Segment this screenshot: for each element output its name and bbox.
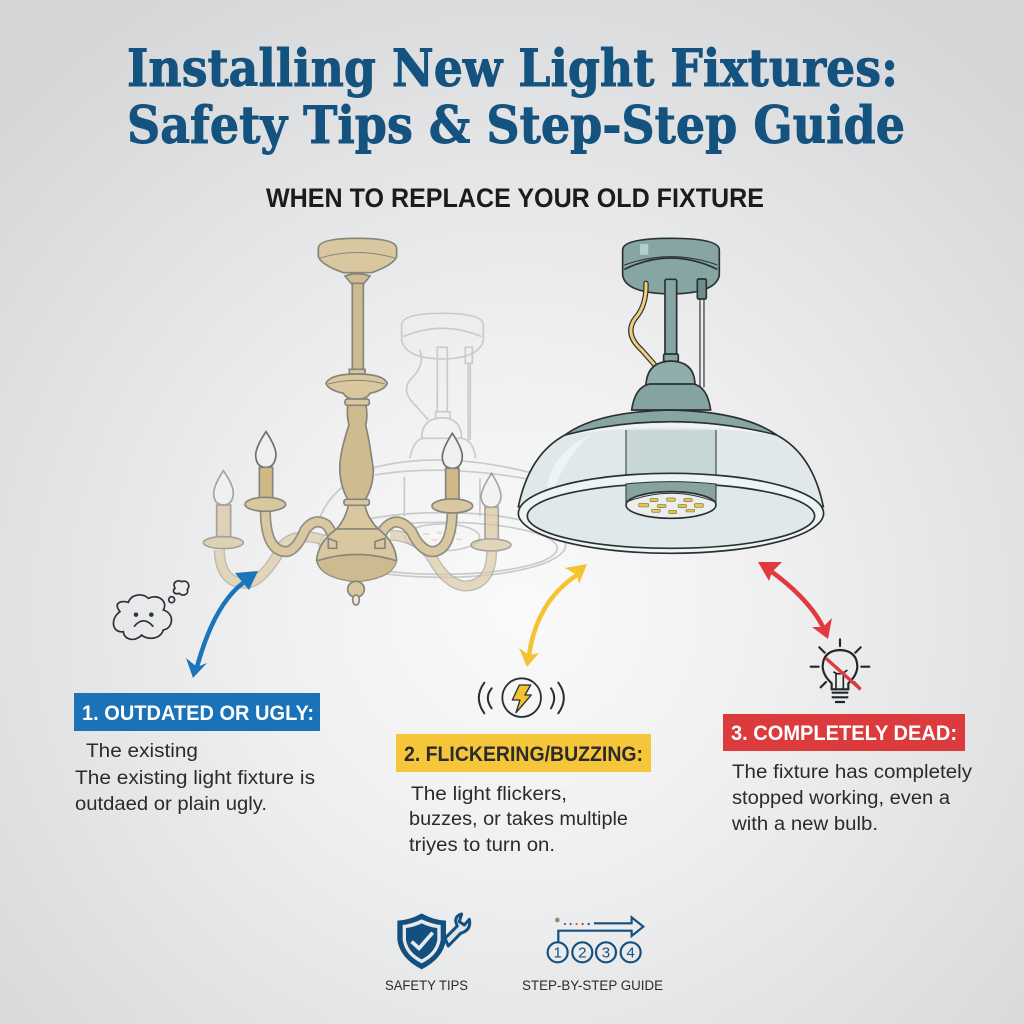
text block 1: The existing — [86, 741, 198, 762]
label: step-by-step guide: STEP-BY-STEP GUIDE — [522, 978, 663, 993]
text block 1: The existing light fixture is — [75, 768, 315, 789]
title: Installing New Light Fixtures: — [127, 39, 898, 99]
label bar blue: 1. OUTDATED OR UGLY: — [82, 701, 314, 725]
front arms — [265, 508, 333, 552]
domes — [646, 361, 695, 385]
hub — [317, 529, 397, 582]
cup — [326, 374, 387, 399]
LED plate — [626, 492, 716, 518]
text block 2: triyes to turn on. — [409, 835, 555, 856]
canopy — [623, 238, 719, 294]
glass shade — [518, 422, 823, 507]
icon: step-by-step arrow: 3 — [602, 945, 610, 962]
icon: step-by-step arrow: 4 — [626, 945, 635, 962]
text block 1 — [75, 741, 315, 815]
rim — [518, 473, 824, 553]
icon: sad cloud — [113, 581, 189, 639]
label: safety tips: SAFETY TIPS — [385, 978, 468, 993]
ghost pendant outline — [318, 313, 566, 577]
label bar red: 3. COMPLETELY DEAD: — [731, 721, 957, 745]
label bar yellow — [396, 734, 651, 772]
text block 3: with a new bulb. — [731, 814, 878, 835]
title — [127, 39, 905, 156]
canopy — [318, 238, 397, 273]
callout 1: outdated or ugly — [74, 693, 320, 815]
icon: flickering bolt — [479, 678, 564, 717]
callout 2: flickering or buzzing — [396, 734, 651, 856]
icon: step-by-step arrow: 1 — [553, 945, 562, 962]
label bar red — [723, 714, 965, 751]
icon: dead bulb — [811, 639, 869, 702]
label bar blue — [74, 693, 320, 731]
inner tube — [626, 430, 716, 475]
rods — [665, 279, 677, 355]
text block 3: The fixture has completely — [732, 762, 973, 783]
baluster — [340, 405, 373, 500]
rod — [352, 283, 363, 369]
label bar yellow: 2. FLICKERING/BUZZING: — [404, 742, 643, 766]
text block 3 — [731, 762, 973, 835]
text block 2: The light flickers, — [411, 784, 567, 805]
faded rear arms — [203, 471, 511, 586]
arrow: yellow — [519, 564, 587, 667]
callout 3: completely dead — [723, 714, 973, 835]
icon: step-by-step arrow: 2 — [578, 945, 586, 962]
wire — [631, 283, 654, 364]
icon: safety shield and wrench — [397, 913, 470, 969]
old chandelier — [203, 238, 511, 605]
arrow: blue — [186, 571, 258, 678]
text block 1: outdaed or plain ugly. — [75, 794, 267, 815]
finial — [348, 581, 364, 597]
new pendant fixture — [518, 238, 824, 553]
title: Safety Tips & Step-Step Guide — [127, 96, 905, 156]
arrow: red — [758, 562, 832, 639]
section heading: WHEN TO REPLACE YOUR OLD FIXTURE — [266, 183, 764, 213]
front candles — [256, 432, 276, 467]
text block 3: stopped working, even a — [732, 788, 950, 809]
text block 2: buzzes, or takes multiple — [409, 809, 628, 830]
text block 2 — [409, 784, 628, 856]
icon: step-by-step arrow — [548, 917, 643, 962]
